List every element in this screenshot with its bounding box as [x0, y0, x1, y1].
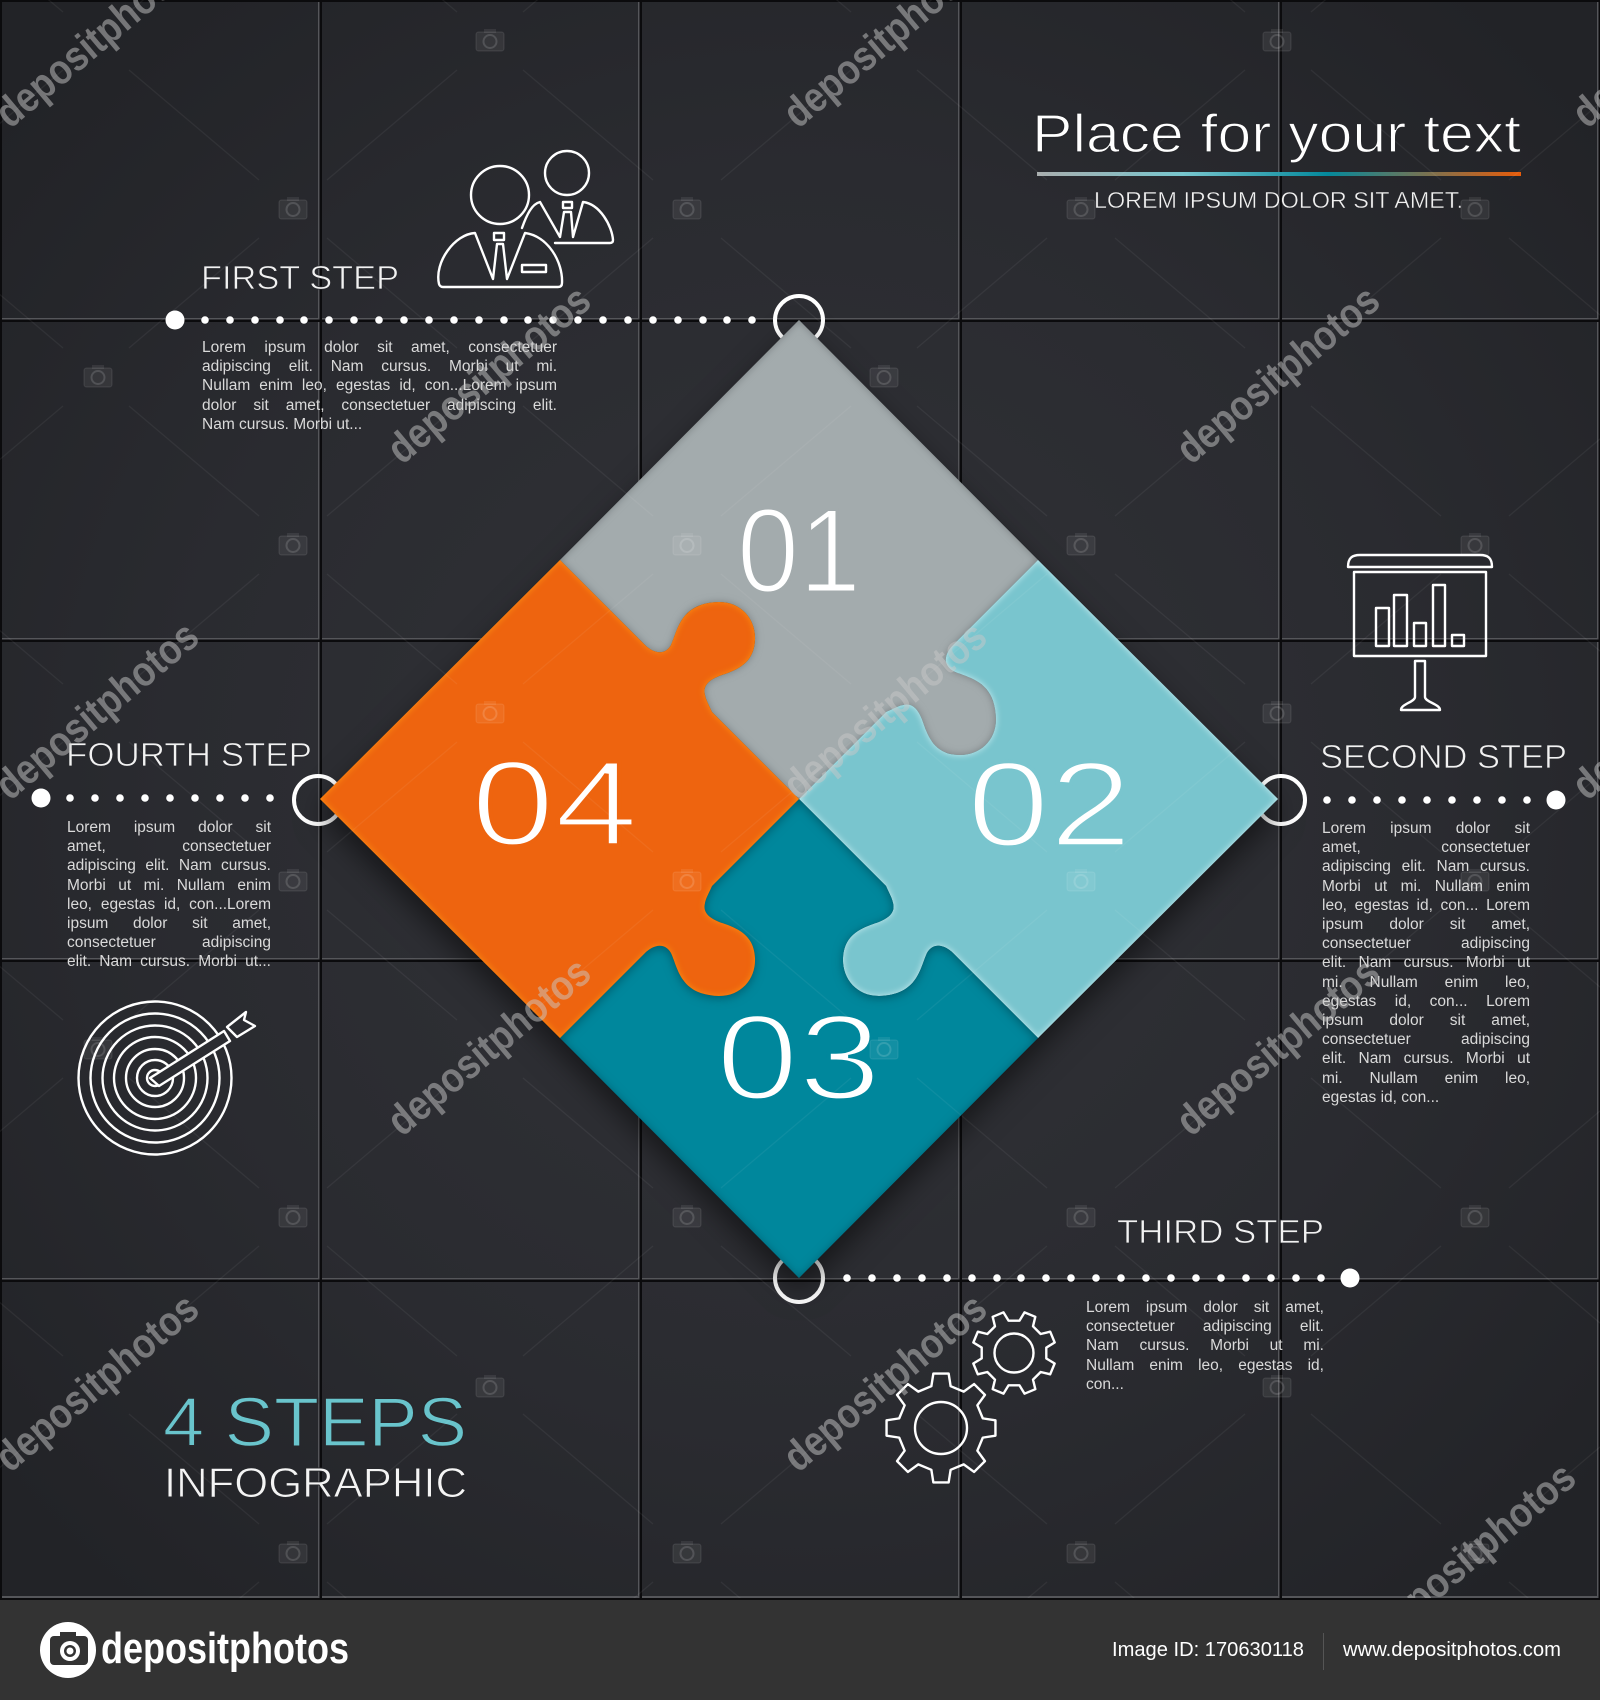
text block: second step: ipsum dolor sit amet, — [1322, 916, 1530, 933]
text block: second step: consectetuer adipiscing — [1322, 1031, 1530, 1048]
number 01: 01 — [737, 484, 861, 618]
step label: third: THIRD STEP — [1117, 1213, 1324, 1250]
title underline — [1037, 172, 1521, 176]
heading: 4 steps: 4 STEPS — [163, 1383, 467, 1461]
puzzle piece 04 orange — [320, 560, 799, 1038]
icon: target with arrow — [78, 1002, 255, 1154]
text block: fourth step — [67, 819, 271, 970]
watermark layer: depositphotos — [774, 1284, 995, 1480]
watermark layer: depositphotos — [378, 276, 599, 472]
number 04: 04 — [471, 735, 638, 871]
number 03: 03 — [716, 989, 881, 1125]
footer logo mark — [40, 1622, 96, 1678]
footer image id: Image ID: 170630118 — [1112, 1639, 1304, 1661]
text block: second step: mi. Nullam enim leo, — [1322, 974, 1530, 991]
dotted line: second step — [1323, 790, 1566, 810]
text block: first step: Nam cursus. Morbi ut... — [202, 416, 362, 433]
text block: second step: egestas id, con... Lorem — [1322, 993, 1530, 1010]
watermark layer: depositphotos — [774, 612, 995, 808]
text block: fourth step: elit. Nam cursus. Morbi ut... — [67, 953, 271, 970]
text block: fourth step: Morbi ut mi. Nullam enim — [67, 877, 271, 894]
text block: second step: elit. Nam cursus. Morbi ut — [1322, 1050, 1530, 1067]
text block: second step: amet, consectetuer — [1322, 839, 1530, 856]
text block: first step — [202, 339, 557, 433]
text block: third step: Nullam enim leo, egestas id, — [1086, 1357, 1324, 1374]
step label: fourth: FOURTH STEP — [66, 736, 312, 773]
text block: second step: leo, egestas id, con... Lorem — [1322, 897, 1530, 914]
heading: infographic: INFOGRAPHIC — [164, 1459, 467, 1506]
text block: second step: Morbi ut mi. Nullam enim — [1322, 878, 1530, 895]
text block: second step: adipiscing elit. Nam cursus. — [1322, 858, 1530, 875]
connector rings at diamond corners — [294, 296, 1305, 1302]
text block: second step: ipsum dolor sit amet, — [1322, 1012, 1530, 1029]
puzzle diamond — [320, 320, 1278, 1278]
text block: fourth step: leo, egestas id, con...Lorem — [67, 896, 271, 913]
text block: second step: consectetuer adipiscing — [1322, 935, 1530, 952]
puzzle piece 03 dark teal — [560, 799, 1038, 1278]
watermark layer: depositphotos — [1167, 948, 1388, 1144]
watermark layer: depositphotos — [378, 948, 599, 1144]
puzzle piece 02 light teal — [799, 560, 1278, 1038]
text block: first step: Lorem ipsum dolor sit amet, consectetuer — [202, 339, 557, 356]
text block: third step: Nam cursus. Morbi ut mi. — [1086, 1337, 1324, 1354]
text block: fourth step: Lorem ipsum dolor sit — [67, 819, 271, 836]
text block: third step — [1086, 1299, 1324, 1393]
text block: first step: dolor sit amet, consectetuer adipiscing elit. — [202, 397, 557, 414]
icon: business people — [438, 151, 613, 287]
footer logo text: depositphotos — [101, 1624, 349, 1673]
watermark layer: depositphotos — [1167, 276, 1388, 472]
text block: fourth step: adipiscing elit. Nam cursus. — [67, 857, 271, 874]
text block: third step: consectetuer adipiscing elit. — [1086, 1318, 1324, 1335]
dotted line: first step — [166, 310, 756, 330]
title: Place for your text — [1032, 104, 1521, 164]
text block: first step: adipiscing elit. Nam cursus. Morbi ut mi. — [202, 358, 557, 375]
footer url: www.depositphotos.com — [1342, 1639, 1561, 1661]
footer bar — [0, 1600, 1600, 1700]
icon: gears — [887, 1299, 1068, 1482]
text block: second step: egestas id, con... — [1322, 1089, 1439, 1106]
text block: second step — [1322, 820, 1530, 1106]
text block: second step: elit. Nam cursus. Morbi ut — [1322, 954, 1530, 971]
text block: fourth step: amet, consectetuer — [67, 838, 271, 855]
dotted line: third step — [843, 1268, 1360, 1288]
puzzle piece 01 grey — [560, 320, 1038, 799]
subtitle: LOREM IPSUM DOLOR SIT AMET. — [1094, 187, 1463, 213]
text block: fourth step: consectetuer adipiscing — [67, 934, 271, 951]
text block: third step: con... — [1086, 1376, 1124, 1393]
text block: second step: mi. Nullam enim leo, — [1322, 1070, 1530, 1087]
step label: second: SECOND STEP — [1320, 738, 1567, 775]
icon: presentation board — [1348, 555, 1492, 710]
step label: first: FIRST STEP — [201, 259, 399, 296]
dotted line: fourth step — [32, 788, 274, 808]
text block: third step: Lorem ipsum dolor sit amet, — [1086, 1299, 1324, 1316]
text block: second step: Lorem ipsum dolor sit — [1322, 820, 1530, 837]
number 02: 02 — [967, 736, 1132, 872]
text block: first step: Nullam enim leo, egestas id, con...Lorem ipsum — [202, 377, 557, 394]
text block: fourth step: ipsum dolor sit amet, — [67, 915, 271, 932]
